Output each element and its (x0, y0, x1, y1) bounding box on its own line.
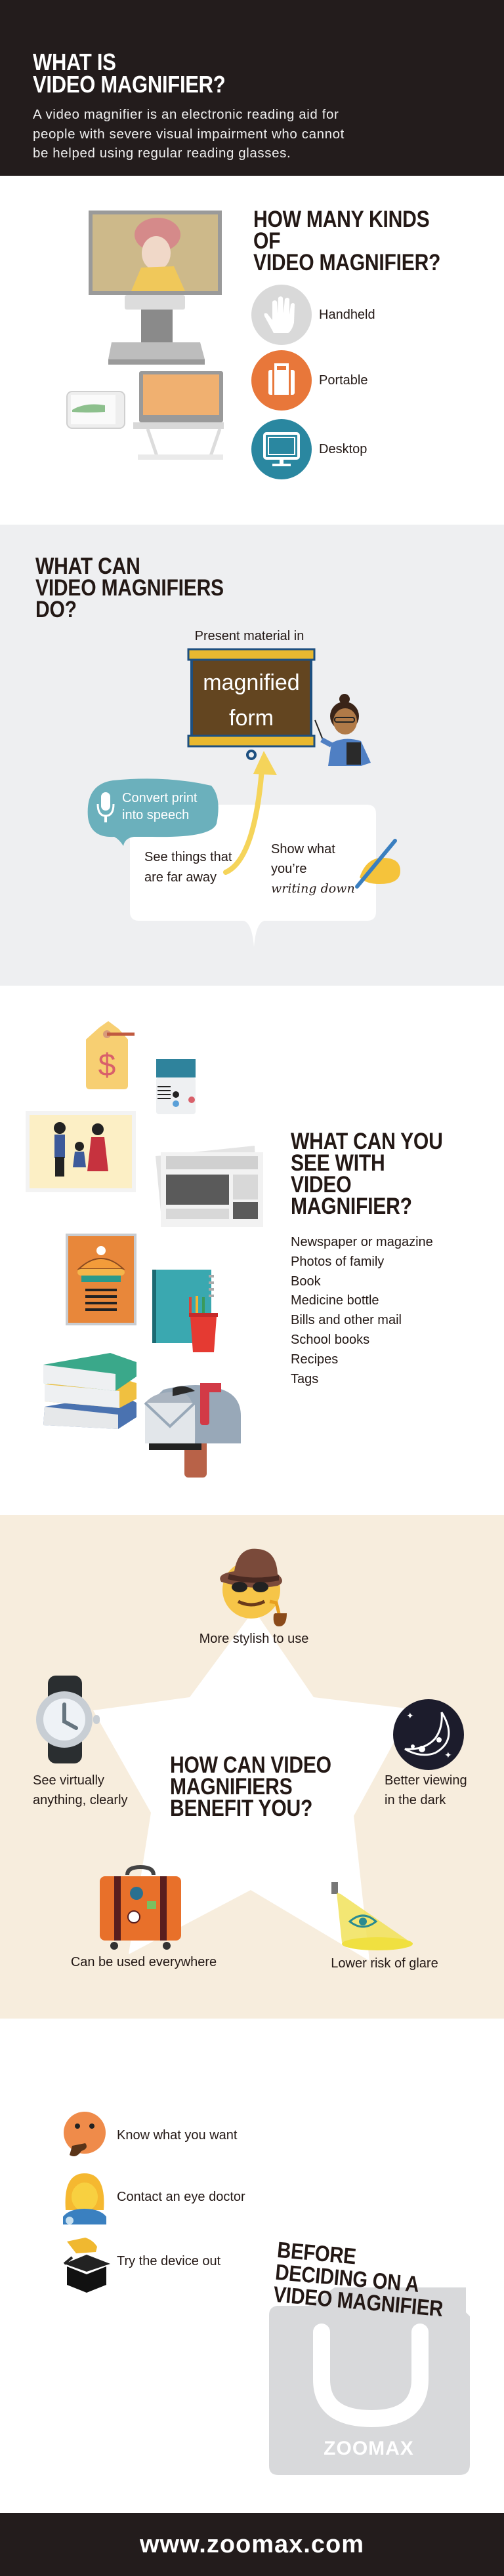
list of items: Bills and other mail (291, 1313, 402, 1327)
label: more stylish: More stylish to use (200, 1632, 308, 1646)
label: better viewing in dark (385, 1773, 467, 1807)
label: present material in: Present material in (195, 629, 304, 643)
header description: be helped using regular reading glasses. (33, 146, 291, 161)
item: know what you want (64, 2112, 238, 2156)
text: see things far away: See things that (144, 850, 232, 864)
heading: benefits (170, 1752, 331, 1821)
label: see virtually anything: anything, clearly (33, 1793, 128, 1807)
kinds heading: VIDEO MAGNIFIER? (253, 250, 440, 275)
callout: convert print into speech: Convert print (122, 791, 197, 805)
icon: family photo (26, 1111, 136, 1192)
heading: what can you see: SEE WITH (291, 1150, 385, 1176)
icon: writing hand (355, 839, 400, 889)
icon: stylish emoji (220, 1549, 287, 1626)
heading: before deciding: DECIDING ON A (274, 2260, 420, 2297)
label: know what you want: Know what you want (117, 2128, 237, 2143)
label: contact eye doctor: Contact an eye doctor (117, 2190, 245, 2204)
header section (0, 0, 504, 176)
icon: watch (36, 1676, 100, 1763)
star shape (93, 1617, 405, 1961)
arrow: yellow curve (223, 751, 277, 875)
list of items: Newspaper or magazine (291, 1235, 433, 1249)
heading: what can you see: WHAT CAN YOU (291, 1129, 443, 1154)
heading: what can you see: MAGNIFIER? (291, 1194, 412, 1219)
panel: what can you see (0, 986, 504, 1515)
icon: thinking face (64, 2112, 106, 2156)
icon: lamp with eye (331, 1882, 413, 1950)
label: better viewing in dark: in the dark (385, 1793, 446, 1807)
header title (33, 49, 225, 98)
icon: stack of books (43, 1353, 136, 1429)
heading: before deciding: VIDEO MAGNIFIER (272, 2282, 444, 2322)
header title: WHAT IS (33, 49, 116, 75)
icon: newspaper (156, 1146, 263, 1227)
heading: before deciding (272, 2239, 448, 2320)
icon: moon: ✦ (406, 1710, 414, 1721)
panel: what can video magnifiers do (0, 525, 504, 986)
list of items: Medicine bottle (291, 1293, 379, 1308)
heading: what can you see (291, 1129, 443, 1219)
panel: kinds of video magnifier (0, 176, 504, 525)
list of items: School books (291, 1333, 369, 1347)
board: magnified form: magnified (203, 670, 300, 695)
callout: convert print into speech: into speech (122, 808, 189, 822)
label: try the device out: Try the device out (117, 2254, 220, 2268)
icon: hand (251, 285, 312, 345)
icon: box with hand (63, 2238, 112, 2293)
item: desktop (251, 419, 367, 479)
kinds heading (253, 207, 440, 275)
icon: doctor (63, 2171, 106, 2224)
label: desktop: Desktop (319, 442, 367, 456)
heading: before deciding: BEFORE (276, 2238, 357, 2269)
heading: benefits: BENEFIT YOU? (170, 1796, 312, 1821)
header title: VIDEO MAGNIFIER? (33, 71, 225, 98)
icon: moon: ✦ (444, 1750, 452, 1760)
label: handheld: Handheld (319, 308, 375, 322)
icon: monitor (251, 419, 312, 479)
label: better viewing in dark: Better viewing (385, 1773, 467, 1788)
list of items: Tags (291, 1372, 318, 1386)
label: portable: Portable (319, 373, 368, 388)
icon: price tag: $ (98, 1048, 116, 1083)
do heading: VIDEO MAGNIFIERS (35, 575, 224, 601)
heading: benefits: HOW CAN VIDEO (170, 1752, 331, 1778)
do heading: DO? (35, 597, 77, 622)
heading: benefits: MAGNIFIERS (170, 1774, 292, 1800)
header description: people with severe visual impairment who cannot (33, 126, 345, 142)
icon: teacher (314, 694, 371, 766)
device photos (66, 211, 224, 460)
label: lower risk of glare: Lower risk of glare (331, 1956, 438, 1971)
item: try the device (63, 2238, 260, 2293)
kinds heading: HOW MANY KINDS (253, 207, 429, 232)
panel: before deciding (0, 2019, 504, 2513)
icon: shopping bag: ZOOMAX (324, 2438, 414, 2459)
icon: briefcase (251, 350, 312, 411)
board: magnified form: form (229, 706, 274, 731)
callout: convert print into speech (88, 778, 219, 846)
text: show what you're writing down: writing down (271, 881, 355, 896)
icon: suitcase (100, 1865, 181, 1950)
board: magnified form (188, 648, 315, 760)
item: contact eye doctor (63, 2171, 273, 2226)
kinds heading: OF (253, 228, 280, 254)
item: handheld (251, 285, 375, 345)
icon: shopping bag (269, 2287, 472, 2478)
list of items: Photos of family (291, 1255, 384, 1269)
icon: mailbox (144, 1383, 241, 1478)
list of items: Book (291, 1274, 321, 1289)
text: see things far away: are far away (144, 870, 217, 885)
icon: moon (393, 1699, 464, 1770)
text: show what you're writing down: Show what (271, 842, 335, 856)
list of items: Recipes (291, 1352, 338, 1367)
heading: what can you see: VIDEO (291, 1172, 351, 1197)
header description (33, 107, 345, 161)
text: see things far away (144, 850, 232, 885)
item: portable (251, 350, 368, 411)
text: show what you're writing down: you’re (271, 862, 306, 876)
icon: price tag (86, 1021, 135, 1089)
icon: medicine bottle (156, 1059, 196, 1114)
label: see virtually anything: See virtually (33, 1773, 104, 1788)
do heading: WHAT CAN (35, 553, 140, 579)
list of items (291, 1235, 433, 1386)
footer (0, 2513, 504, 2576)
footer url: www.zoomax.com (140, 2531, 364, 2558)
do heading (35, 553, 224, 622)
panel: benefits (0, 1515, 504, 2019)
icon: notebook and pencils (152, 1270, 218, 1352)
label: see virtually anything (33, 1773, 128, 1807)
icon: recipe card (66, 1234, 136, 1325)
header description: A video magnifier is an electronic reading aid for (33, 107, 339, 122)
white speech card (130, 805, 376, 946)
text: show what you're writing down (271, 842, 355, 896)
label: can be used everywhere: Can be used everywhere (71, 1955, 217, 1969)
